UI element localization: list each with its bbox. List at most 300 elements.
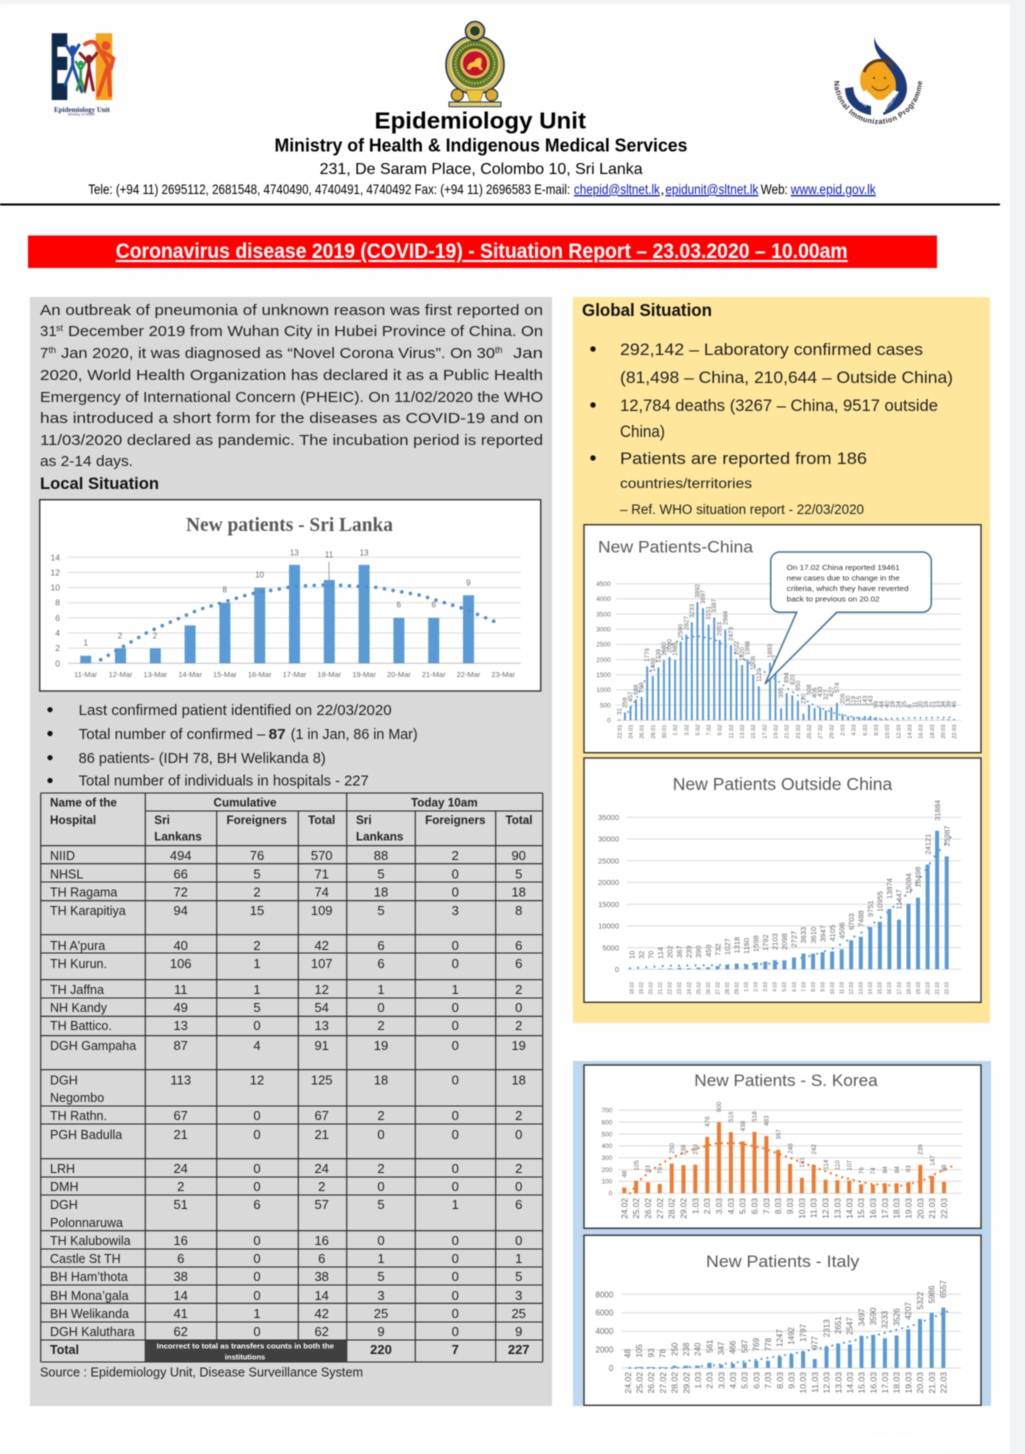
- value labels: 1980: [661, 641, 668, 656]
- value labels: 2022: [734, 640, 740, 655]
- value labels: 9751: [866, 900, 875, 917]
- value labels: 9: [466, 578, 471, 587]
- row: NHSL: [50, 866, 522, 882]
- x axis labels: 28.01: [651, 724, 657, 739]
- bulleted list: local facts: [47, 703, 418, 790]
- value labels: 19: [890, 700, 897, 708]
- callout: 17.02 China note: On 17.02 China reported 19461: [787, 563, 900, 572]
- x axis labels: 15.03: [856, 1198, 866, 1219]
- row: DGH Gampaha: 91: [314, 1038, 329, 1053]
- text: contact details: www.epid.gov.lk: [790, 181, 877, 197]
- y axis labels: 4000: [596, 1327, 614, 1336]
- x axis labels: 9.03: [820, 982, 826, 992]
- y axis labels: 8: [55, 598, 60, 608]
- value labels: 119: [851, 695, 858, 706]
- x axis labels: 4.03: [728, 1372, 738, 1389]
- table header: Lankans: [154, 831, 202, 844]
- value labels: 2651: [834, 1316, 843, 1334]
- y axis labels: 4500: [596, 581, 611, 588]
- text block: outbreak introduction: Jan 2020, it was diagnosed as “Novel Corona Virus”. On 30: [61, 345, 495, 362]
- value labels: 31884: [933, 800, 942, 821]
- x axis labels: 27.02: [655, 1198, 665, 1219]
- x axis labels: 3.03: [716, 1372, 726, 1389]
- row: DMH: 2: [318, 1179, 325, 1194]
- y axis labels: 100: [601, 1179, 613, 1186]
- text: address: 231, De Saram Place, Colombo 10, Sri Lanka: [320, 161, 643, 178]
- row: DGH Negombo: 12: [250, 1072, 264, 1088]
- bulleted list: global facts: – Ref. WHO situation report - 22/03/2020: [620, 502, 864, 517]
- logo: National Immunization Programme: Protection: [885, 90, 900, 111]
- value labels: 74: [870, 1167, 877, 1174]
- panel: South Korea and Italy: [573, 1061, 991, 1406]
- text block: outbreak introduction: Jan: [513, 345, 543, 362]
- x axis labels: 19.03: [903, 1372, 913, 1394]
- x axis labels: 10.03: [797, 1198, 807, 1219]
- row: DGH Kaluthara: 62: [314, 1324, 329, 1339]
- row: DGH Kaluthara: 9: [377, 1324, 385, 1339]
- logo: Epidemiology Unit: [52, 33, 113, 116]
- row: TH Karapitiya: 5: [377, 903, 385, 918]
- value labels: 93: [645, 1165, 652, 1172]
- table header: Sri: [154, 814, 170, 827]
- y axis labels: 5000: [602, 943, 619, 952]
- row: TH Rathn.: [50, 1108, 522, 1123]
- y axis labels: 6: [55, 613, 60, 623]
- x axis labels: 28.02: [667, 1198, 677, 1219]
- y axis labels: 0: [607, 718, 611, 725]
- row: TH Kurun.: 6: [377, 956, 385, 971]
- row: DGH Polonnaruwa: DGH: [50, 1198, 78, 1212]
- row: TH A'pura: 6: [377, 938, 385, 953]
- row: TH Battico.: 2: [377, 1018, 385, 1033]
- value labels: 239: [685, 945, 694, 958]
- x axis labels: 12.03: [849, 982, 855, 995]
- x axis labels: 23-Mar: [491, 670, 516, 679]
- x axis labels: [619, 1198, 949, 1219]
- y axis labels: 30000: [598, 835, 619, 844]
- value labels: 7488: [856, 910, 866, 927]
- y axis labels: 600: [601, 1119, 613, 1126]
- x axis labels: 28.02: [725, 982, 731, 995]
- text: contact details: Web:: [761, 181, 788, 197]
- x axis labels: 5.02: [695, 724, 701, 736]
- x axis labels: 1.02: [673, 724, 679, 736]
- x axis labels: 19.03: [904, 1198, 914, 1219]
- x axis labels: 21.03: [927, 1198, 937, 1219]
- x axis labels: 14.03: [868, 982, 874, 995]
- trend line: [101, 585, 498, 660]
- row: BH Mona'gala: 3: [377, 1288, 385, 1303]
- row: DGH Kaluthara: 62: [173, 1324, 188, 1339]
- row: TH Battico.: 13: [173, 1018, 188, 1033]
- table header: Hospital: [50, 814, 96, 827]
- row: TH Battico.: 13: [314, 1018, 329, 1033]
- value labels: 395: [778, 687, 785, 698]
- y axis labels: 4: [55, 628, 60, 638]
- row: DGH Kaluthara: 9: [515, 1324, 522, 1339]
- x axis labels: 19.03: [916, 982, 922, 995]
- x axis labels: [74, 670, 516, 679]
- value labels: 347: [717, 1341, 726, 1355]
- row: LRH: 24: [173, 1161, 188, 1176]
- row: DGH Gampaha: 19: [374, 1038, 388, 1053]
- x axis labels: 18.03: [892, 1198, 902, 1219]
- bulleted list: global facts: 292,142 – Laboratory confirmed cases: [620, 341, 923, 359]
- value labels: 238: [682, 1342, 691, 1356]
- y axis labels: 14: [51, 552, 60, 562]
- bar chart: new patients South Korea: [584, 1065, 981, 1228]
- title banner: Coronavirus disease 2019 (COVID-19) - Situation Report – 23.03.2020 – 10.00am: [116, 240, 848, 263]
- x axis labels: 16.03: [887, 982, 893, 995]
- trend line: [630, 1143, 953, 1193]
- value labels: 240: [692, 1144, 700, 1155]
- value labels: 390: [694, 945, 703, 958]
- row: TH Karapitiya: 3: [452, 903, 459, 918]
- x axis labels: 10.03: [830, 982, 836, 995]
- x axis labels: 21.03: [927, 1372, 937, 1394]
- logo: Epidemiology Unit: Ministry of Health: [68, 112, 95, 116]
- x axis labels: 29.02: [829, 724, 835, 739]
- value labels: 78: [657, 1166, 664, 1174]
- x axis labels: 21.02: [658, 982, 664, 995]
- x axis labels: 19.02: [639, 982, 645, 995]
- row: NH Kandy: 0: [452, 1000, 459, 1015]
- value labels: 1598: [752, 935, 760, 952]
- row: BH Ham'thota: [50, 1269, 522, 1284]
- row: TH Ragama: 72: [173, 884, 188, 900]
- value labels: 238: [681, 1144, 688, 1155]
- row: TH Kalubowila: 16: [173, 1233, 188, 1248]
- y axis labels: 10: [51, 583, 60, 593]
- y axis labels: 10000: [598, 922, 619, 931]
- table header: Lankans: [356, 831, 404, 844]
- value labels: 6703: [847, 913, 856, 930]
- x axis labels: 30.01: [662, 724, 668, 739]
- row: total: 7: [452, 1342, 459, 1357]
- x axis labels: 18-Mar: [317, 670, 342, 679]
- x axis labels: 19-Mar: [352, 670, 376, 679]
- x axis labels: 22.03: [938, 1372, 948, 1394]
- x axis labels: 13.03: [859, 982, 865, 995]
- x axis labels: 19.02: [774, 724, 780, 739]
- y axis labels: 25000: [598, 856, 619, 865]
- x axis labels: 17.03: [897, 982, 903, 995]
- x axis labels: 24.02: [687, 982, 693, 995]
- row: PGH Badulla: 21: [173, 1127, 188, 1142]
- x axis labels: 26.02: [646, 1372, 656, 1394]
- x axis labels: 23.02: [796, 724, 802, 739]
- value labels: 3633: [799, 927, 808, 944]
- row: TH Karapitiya: [50, 903, 522, 918]
- row: BH Mona'gala: 0: [452, 1288, 459, 1303]
- x axis labels: 20.03: [941, 724, 947, 739]
- bar chart: new patients outside China: [584, 758, 981, 1002]
- chart title: New Patients-China: [598, 538, 754, 557]
- text block: outbreak introduction: 2020, World Health Organization has declared it as a Public Health: [40, 367, 543, 384]
- value labels: 11: [912, 701, 919, 708]
- row: NH Kandy: 5: [253, 1000, 261, 1015]
- text: data source: Source : Epidemiology Unit, Disease Surveillance System: [40, 1364, 363, 1380]
- bulleted list: local facts: Last confirmed patient identified on 22/03/2020: [79, 703, 392, 719]
- bulleted list: local facts: Total number of individuals in hospitals - 227: [79, 774, 369, 790]
- logo: Epidemiology Unit: Epidemiology Unit: [54, 106, 111, 114]
- value labels: 5322: [916, 1291, 925, 1310]
- row: BH Mona'gala: 3: [515, 1288, 522, 1303]
- row: TH Ragama: 2: [253, 884, 261, 900]
- value labels: 40: [884, 700, 891, 708]
- value labels: 78: [659, 1349, 668, 1358]
- value labels: 10: [627, 951, 636, 959]
- row: PGH Badulla: PGH Badulla: [50, 1128, 122, 1142]
- value labels: 10: [255, 570, 265, 579]
- row: PGH Badulla: [50, 1127, 522, 1142]
- bars: [86, 565, 468, 663]
- value labels: 574: [834, 682, 841, 693]
- value labels: 70: [646, 951, 656, 959]
- row: DMH: 0: [377, 1179, 385, 1194]
- x axis labels: 8.03: [874, 724, 880, 736]
- value labels: 4596: [837, 922, 846, 939]
- row: Castle St TH: Castle St TH: [50, 1252, 121, 1266]
- value labels: 2984: [722, 610, 729, 625]
- text block: outbreak introduction: st: [56, 323, 64, 333]
- chart title: New Patients - S. Korea: [694, 1072, 879, 1090]
- value labels: 1792: [761, 934, 770, 951]
- row: TH Kalubowila: TH Kalubowila: [50, 1234, 131, 1248]
- row: TH A'pura: 0: [452, 938, 459, 953]
- y axis labels: 35000: [598, 813, 619, 822]
- x axis labels: 18.03: [930, 724, 936, 739]
- value labels: 518: [752, 1111, 759, 1122]
- text block: outbreak introduction: [40, 302, 543, 470]
- row: DGH Kaluthara: DGH Kaluthara: [50, 1325, 135, 1339]
- value labels: 4105: [828, 925, 837, 942]
- y axis labels: 8000: [596, 1290, 614, 1299]
- value labels: 769: [639, 682, 646, 693]
- x axis labels: 25.02: [631, 1198, 641, 1219]
- x axis labels: 11-Mar: [74, 670, 98, 679]
- value labels: 1492: [787, 1326, 796, 1345]
- y axis labels: 3000: [596, 626, 611, 634]
- value labels: 13874: [885, 878, 894, 899]
- value labels: 466: [729, 1340, 738, 1354]
- x axis labels: 12.03: [822, 1372, 832, 1394]
- bulleted list: local facts: 86 patients- (IDH 78, BH Welikanda 8): [79, 751, 326, 767]
- y axis labels: [598, 813, 619, 974]
- value labels: 1998: [745, 640, 752, 655]
- text block: outbreak introduction: 31: [40, 323, 57, 340]
- row: BH Mona'gala: 0: [253, 1288, 261, 1303]
- x axis labels: 4.03: [773, 982, 779, 992]
- row: DGH Polonnaruwa: 6: [515, 1197, 522, 1212]
- row: NIID: 2: [452, 848, 459, 863]
- panel: global situation: [573, 297, 990, 1023]
- chart title: New Patients - Italy: [706, 1253, 860, 1271]
- row: BH Welikanda: 0: [452, 1306, 459, 1321]
- row: PGH Badulla: 0: [253, 1127, 261, 1142]
- value labels: 327: [823, 689, 830, 700]
- value labels: 2098: [780, 933, 789, 950]
- row: TH Jaffna: 1: [452, 982, 459, 997]
- value labels: 977: [811, 1336, 820, 1350]
- y axis labels: 500: [601, 1131, 613, 1138]
- row: TH Battico.: TH Battico.: [50, 1019, 112, 1033]
- bars: [628, 1308, 943, 1368]
- x axis labels: 16-Mar: [248, 670, 272, 679]
- y axis labels: 2: [55, 643, 60, 653]
- x axis labels: 6.03: [751, 1372, 761, 1389]
- row: TH Ragama: [50, 884, 526, 900]
- value labels: 587: [740, 1339, 749, 1353]
- y axis labels: 2000: [596, 657, 611, 664]
- value labels: 1318: [732, 937, 741, 954]
- value labels: 2: [118, 632, 123, 641]
- value labels: 107: [846, 1160, 854, 1171]
- row: TH Karapitiya: 109: [311, 903, 333, 918]
- value labels: 2: [153, 632, 158, 641]
- x axis labels: 21.03: [935, 982, 941, 995]
- x axis labels: 21-Mar: [422, 670, 446, 679]
- x axis labels: 22.03: [952, 724, 958, 739]
- row: DMH: [50, 1179, 522, 1194]
- table header: Name of the: [50, 797, 117, 810]
- x axis labels: 20.03: [915, 1198, 925, 1219]
- x axis labels: 14.03: [844, 1198, 854, 1219]
- x axis labels: 11.03: [840, 982, 846, 994]
- row: TH A'pura: 2: [253, 938, 261, 953]
- title banner: [28, 236, 937, 268]
- value labels: 248: [787, 1143, 794, 1154]
- value labels: 259: [622, 697, 629, 708]
- bulleted list: local facts: 87: [269, 727, 286, 743]
- x axis labels: 18.03: [906, 982, 912, 995]
- trend line: [625, 636, 953, 719]
- table header: [50, 797, 533, 844]
- x axis labels: 1.03: [693, 1372, 703, 1389]
- value labels: 778: [764, 1337, 773, 1351]
- y axis labels: 12: [51, 567, 60, 577]
- x axis labels: 7.03: [801, 982, 807, 992]
- y axis labels: 2500: [596, 642, 611, 649]
- value labels: 459: [704, 944, 713, 957]
- x axis labels: 2.03: [840, 724, 846, 736]
- value labels: 24: [895, 700, 902, 708]
- trend line: [630, 832, 955, 968]
- row: TH Ragama: 74: [314, 884, 329, 900]
- value labels: 600: [716, 1101, 723, 1112]
- x axis labels: 7.03: [761, 1198, 771, 1214]
- row: TH Rathn.: 2: [377, 1108, 385, 1123]
- row: DMH: 0: [253, 1179, 261, 1194]
- value labels: 105: [635, 1344, 644, 1358]
- row: DGH Polonnaruwa: 57: [314, 1197, 329, 1212]
- value labels: 3233: [689, 603, 696, 618]
- x axis labels: 9.03: [786, 1372, 796, 1389]
- y axis labels: 2000: [596, 1346, 614, 1355]
- row: NIID: 570: [311, 848, 333, 863]
- value labels: 76: [858, 1167, 865, 1174]
- x axis labels: 13-Mar: [143, 670, 168, 679]
- x axis labels: 3.02: [684, 724, 690, 736]
- row: DGH Polonnaruwa: 1: [452, 1197, 459, 1212]
- value labels: 4207: [904, 1301, 913, 1320]
- x axis labels: 17.02: [762, 724, 768, 739]
- bulleted list: global facts: 12,784 deaths (3267 – China, 9517 outside: [620, 397, 938, 415]
- row: TH Kalubowila: 0: [377, 1233, 385, 1248]
- row: total: 220: [370, 1342, 392, 1357]
- row: LRH: 24: [314, 1161, 329, 1176]
- row: Castle St TH: 1: [515, 1251, 522, 1266]
- x axis labels: 7.02: [707, 724, 713, 736]
- x axis labels: 20.03: [925, 982, 931, 995]
- bar chart: new patients Sri Lanka: [40, 500, 541, 691]
- value labels: 1757: [772, 654, 780, 669]
- value labels: 99: [873, 700, 880, 708]
- x axis labels: 9.03: [785, 1198, 795, 1214]
- row: BH Ham'thota: 0: [452, 1269, 459, 1284]
- row: BH Mona'gala: BH Mona’gala: [50, 1289, 129, 1303]
- value labels: 1160: [742, 938, 751, 954]
- value labels: 15: [901, 700, 908, 708]
- row: LRH: [50, 1161, 522, 1176]
- row: TH Kurun.: TH Kurun.: [50, 957, 107, 971]
- x axis labels: 5.03: [782, 982, 788, 992]
- value labels: 13: [360, 548, 369, 557]
- value labels: 143: [862, 695, 869, 706]
- row: TH Karapitiya: 15: [250, 903, 264, 918]
- row: PGH Badulla: 0: [515, 1127, 522, 1142]
- row: Castle St TH: 1: [377, 1251, 385, 1266]
- value labels: 561: [705, 1339, 714, 1353]
- x axis labels: 16.03: [868, 1372, 878, 1394]
- row: TH Jaffna: TH Jaffna: [50, 983, 104, 997]
- value labels: 242: [811, 1144, 818, 1155]
- x axis labels: 9.02: [718, 724, 724, 736]
- x axis labels: 6.03: [750, 1198, 760, 1214]
- value labels: 3387: [711, 598, 718, 613]
- text block: outbreak introduction: December 2019 from Wuhan City in Hubei Province of China. On: [68, 323, 543, 340]
- value labels: 894: [784, 672, 791, 683]
- value labels: 5986: [928, 1285, 936, 1303]
- x axis labels: 13.03: [833, 1372, 843, 1394]
- bulleted list: global facts: China): [620, 423, 665, 441]
- value labels: 130: [845, 695, 852, 706]
- value labels: 8: [906, 704, 914, 708]
- value labels: 1: [83, 639, 88, 648]
- x axis labels: 5.03: [738, 1198, 748, 1214]
- x axis labels: [617, 724, 958, 739]
- y axis labels: [601, 1108, 613, 1198]
- x axis labels: 29.02: [678, 1198, 688, 1219]
- row: BH Welikanda: 1: [253, 1306, 261, 1321]
- value labels: 48: [622, 1170, 628, 1178]
- value labels: 6557: [939, 1280, 948, 1298]
- x axis labels: 25.02: [807, 724, 813, 739]
- value labels: 15084: [904, 873, 913, 894]
- bulleted list: global facts: [590, 341, 953, 517]
- row: Castle St TH: 0: [253, 1251, 261, 1266]
- row: DGH Polonnaruwa: 51: [173, 1197, 188, 1212]
- y axis labels: 6000: [596, 1309, 614, 1318]
- row: NHSL: 5: [377, 866, 385, 882]
- value labels: 406: [812, 687, 819, 698]
- x axis labels: 28.02: [670, 1372, 680, 1394]
- row: TH Ragama: 0: [452, 884, 459, 900]
- table: patients by hospital: [41, 793, 543, 1362]
- callout: 17.02 China note: back to previous on 20.02: [787, 594, 880, 604]
- value labels: 147: [929, 1155, 936, 1166]
- x axis labels: 11.02: [729, 724, 735, 738]
